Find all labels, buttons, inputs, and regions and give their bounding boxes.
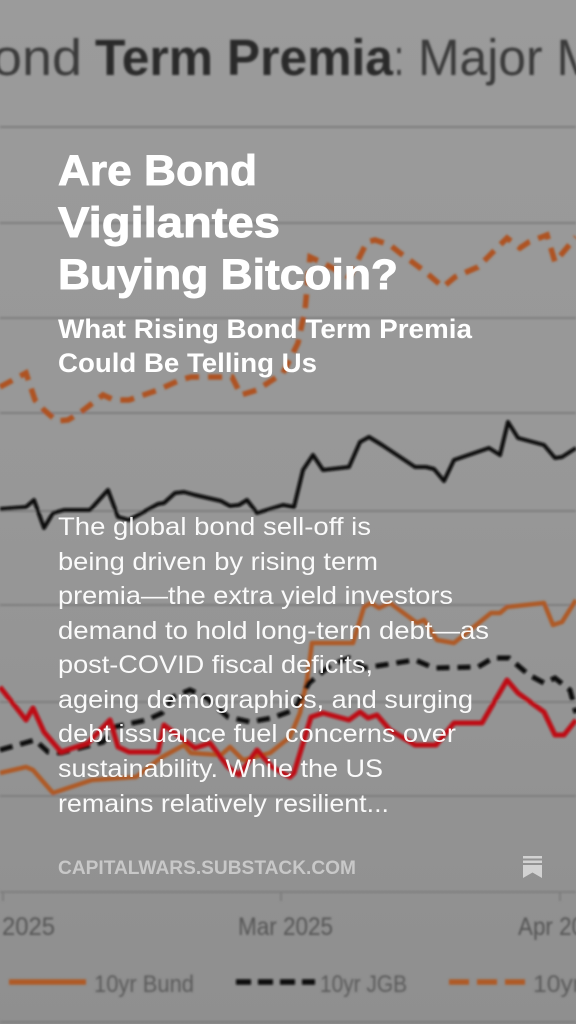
chart title: Term Premia xyxy=(95,29,394,86)
body text: demand to hold long-term debt—as xyxy=(58,617,489,645)
body text: being driven by rising term xyxy=(58,548,378,576)
body text: sustainability. While the US xyxy=(58,755,383,783)
subheading: Could Be Telling Us xyxy=(58,348,317,378)
line: solid red xyxy=(0,680,576,777)
legend: 10yr Bund xyxy=(94,971,194,998)
headline xyxy=(58,147,398,299)
subheading: What Rising Bond Term Premia xyxy=(58,314,472,344)
body text: The global bond sell-off is xyxy=(58,513,371,541)
chart title: : xyxy=(394,29,404,86)
headline: Vigilantes xyxy=(58,199,280,247)
legend: 10yr JGB xyxy=(320,971,407,998)
body text: debt issuance fuel concerns over xyxy=(58,720,456,748)
x axis labels xyxy=(2,913,576,941)
line: dashed orange xyxy=(0,235,576,421)
subheading xyxy=(58,314,472,378)
body text: premia—the extra yield investors xyxy=(58,582,453,610)
body text: post-COVID fiscal deficits, xyxy=(58,651,373,679)
headline: Are Bond xyxy=(58,147,257,195)
line: solid black xyxy=(0,422,576,528)
x axis labels: 2025 xyxy=(2,913,55,941)
chart title xyxy=(0,29,576,86)
icon: bookmark xyxy=(523,856,542,878)
line: 10yr JGB (dashed black) xyxy=(0,658,576,753)
line: 10yr Bund (solid orange) xyxy=(0,600,576,793)
body text: remains relatively resilient... xyxy=(58,790,389,818)
body text xyxy=(58,513,489,818)
body text: ageing demographics, and surging xyxy=(58,686,473,714)
headline: Buying Bitcoin? xyxy=(58,251,398,299)
source URL: CAPITALWARS.SUBSTACK.COM xyxy=(58,858,356,879)
x axis labels: Mar 2025 xyxy=(238,913,333,941)
legend xyxy=(9,971,576,998)
